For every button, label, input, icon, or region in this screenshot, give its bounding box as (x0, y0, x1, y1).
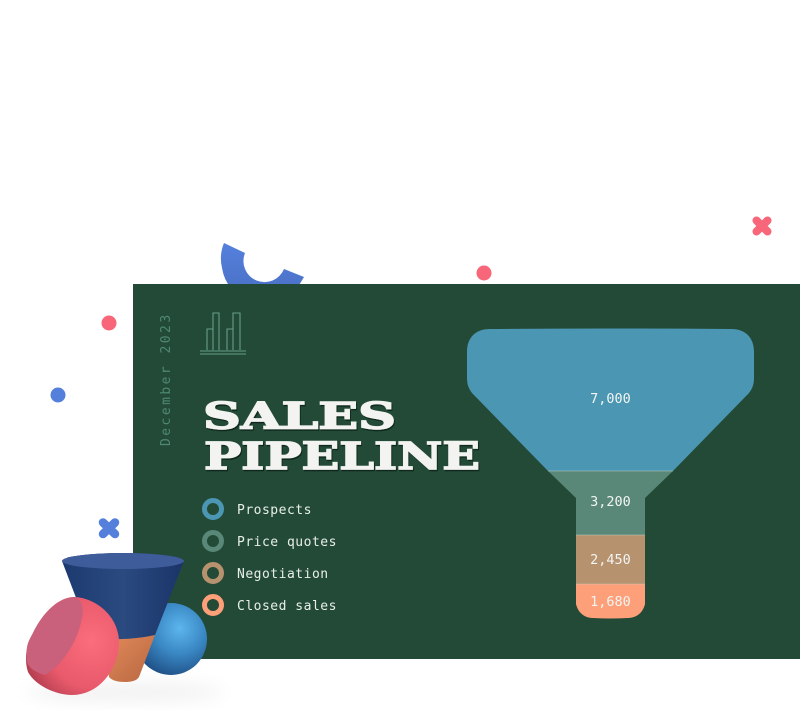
decorative red dot top (476, 266, 492, 280)
illustration: 3D funnel shapes (25, 553, 225, 701)
funnel segment: prospects (467, 328, 754, 471)
ground shadow (25, 683, 225, 701)
legend item: prospects: Prospects (237, 503, 312, 518)
funnel values: 3,200 (590, 494, 631, 510)
funnel chart (467, 328, 754, 618)
funnel values (590, 391, 631, 610)
funnel segment: negotiation (576, 535, 645, 584)
icon: bar chart (200, 313, 246, 354)
date label: December 2023 (159, 312, 174, 446)
legend (204, 500, 337, 614)
legend item: negotiation: Negotiation (237, 567, 329, 582)
decorative blue dot (50, 388, 66, 402)
funnel segment: closed sales (576, 584, 645, 618)
red half sphere face (26, 597, 83, 675)
blue sphere (135, 603, 207, 675)
panel: dark green background (133, 284, 800, 659)
navy cone top (62, 553, 184, 569)
legend item: price quotes: Price quotes (237, 535, 337, 550)
funnel values: 1,680 (590, 594, 631, 610)
icon: red cross (756, 220, 768, 232)
decorative blue arc (221, 243, 304, 300)
orange cone base (105, 635, 155, 682)
title (203, 394, 480, 478)
icon: blue cross (103, 522, 115, 534)
red half sphere (26, 597, 119, 695)
legend item: closed sales: Closed sales (237, 599, 337, 614)
title: PIPELINE (204, 434, 480, 478)
funnel values: 2,450 (590, 552, 631, 568)
title: SALES (203, 394, 396, 438)
decorative red dot left (102, 316, 116, 330)
funnel values: 7,000 (590, 391, 631, 407)
navy cone (62, 553, 184, 639)
funnel segment: price quotes (548, 471, 673, 535)
